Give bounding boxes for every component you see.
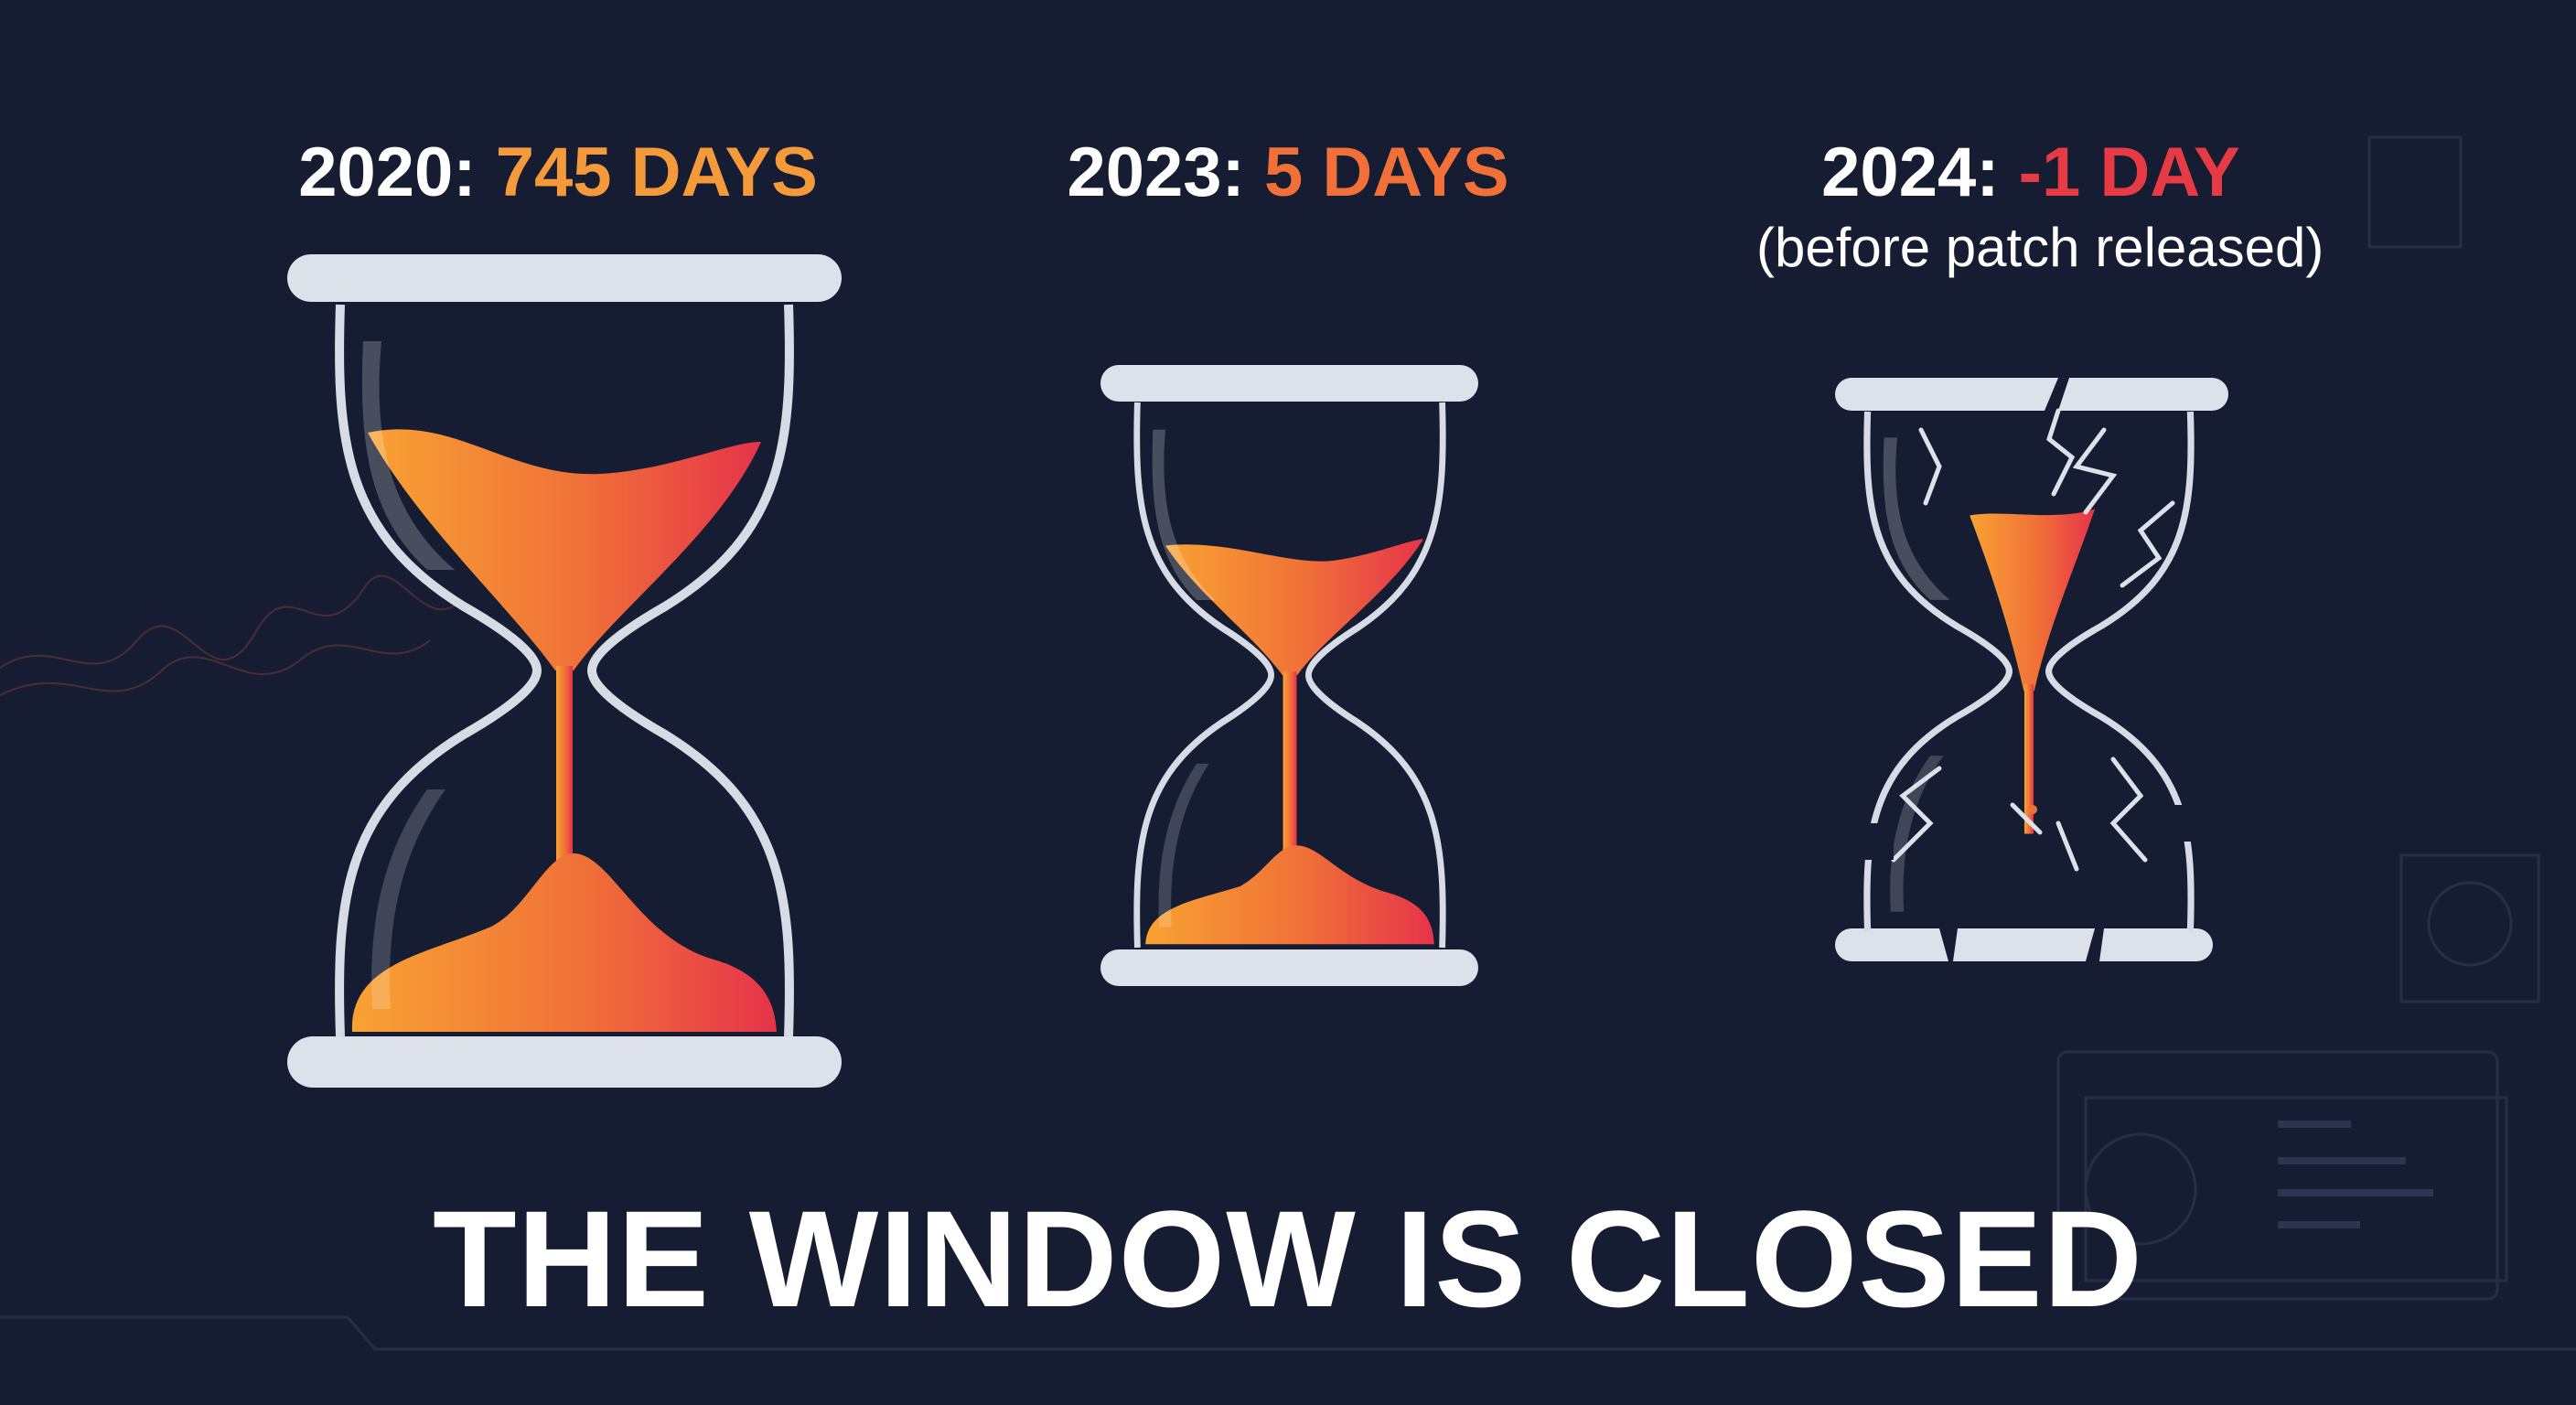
label 2020: 2020: 745 DAYS bbox=[298, 134, 818, 211]
decorative background bbox=[0, 576, 457, 695]
label 2024: 2024: -1 DAY bbox=[1821, 134, 2240, 211]
label 2024: (before patch released) bbox=[1756, 217, 2324, 278]
title: THE WINDOW IS CLOSED bbox=[433, 1182, 2143, 1335]
label 2024 bbox=[1756, 134, 2324, 278]
label 2023: 2023: 5 DAYS bbox=[1067, 134, 1509, 211]
hourglass 2023 bbox=[1100, 365, 1478, 986]
hourglass 2024 broken bbox=[1835, 378, 2228, 961]
hourglass 2020 bbox=[287, 254, 842, 1088]
